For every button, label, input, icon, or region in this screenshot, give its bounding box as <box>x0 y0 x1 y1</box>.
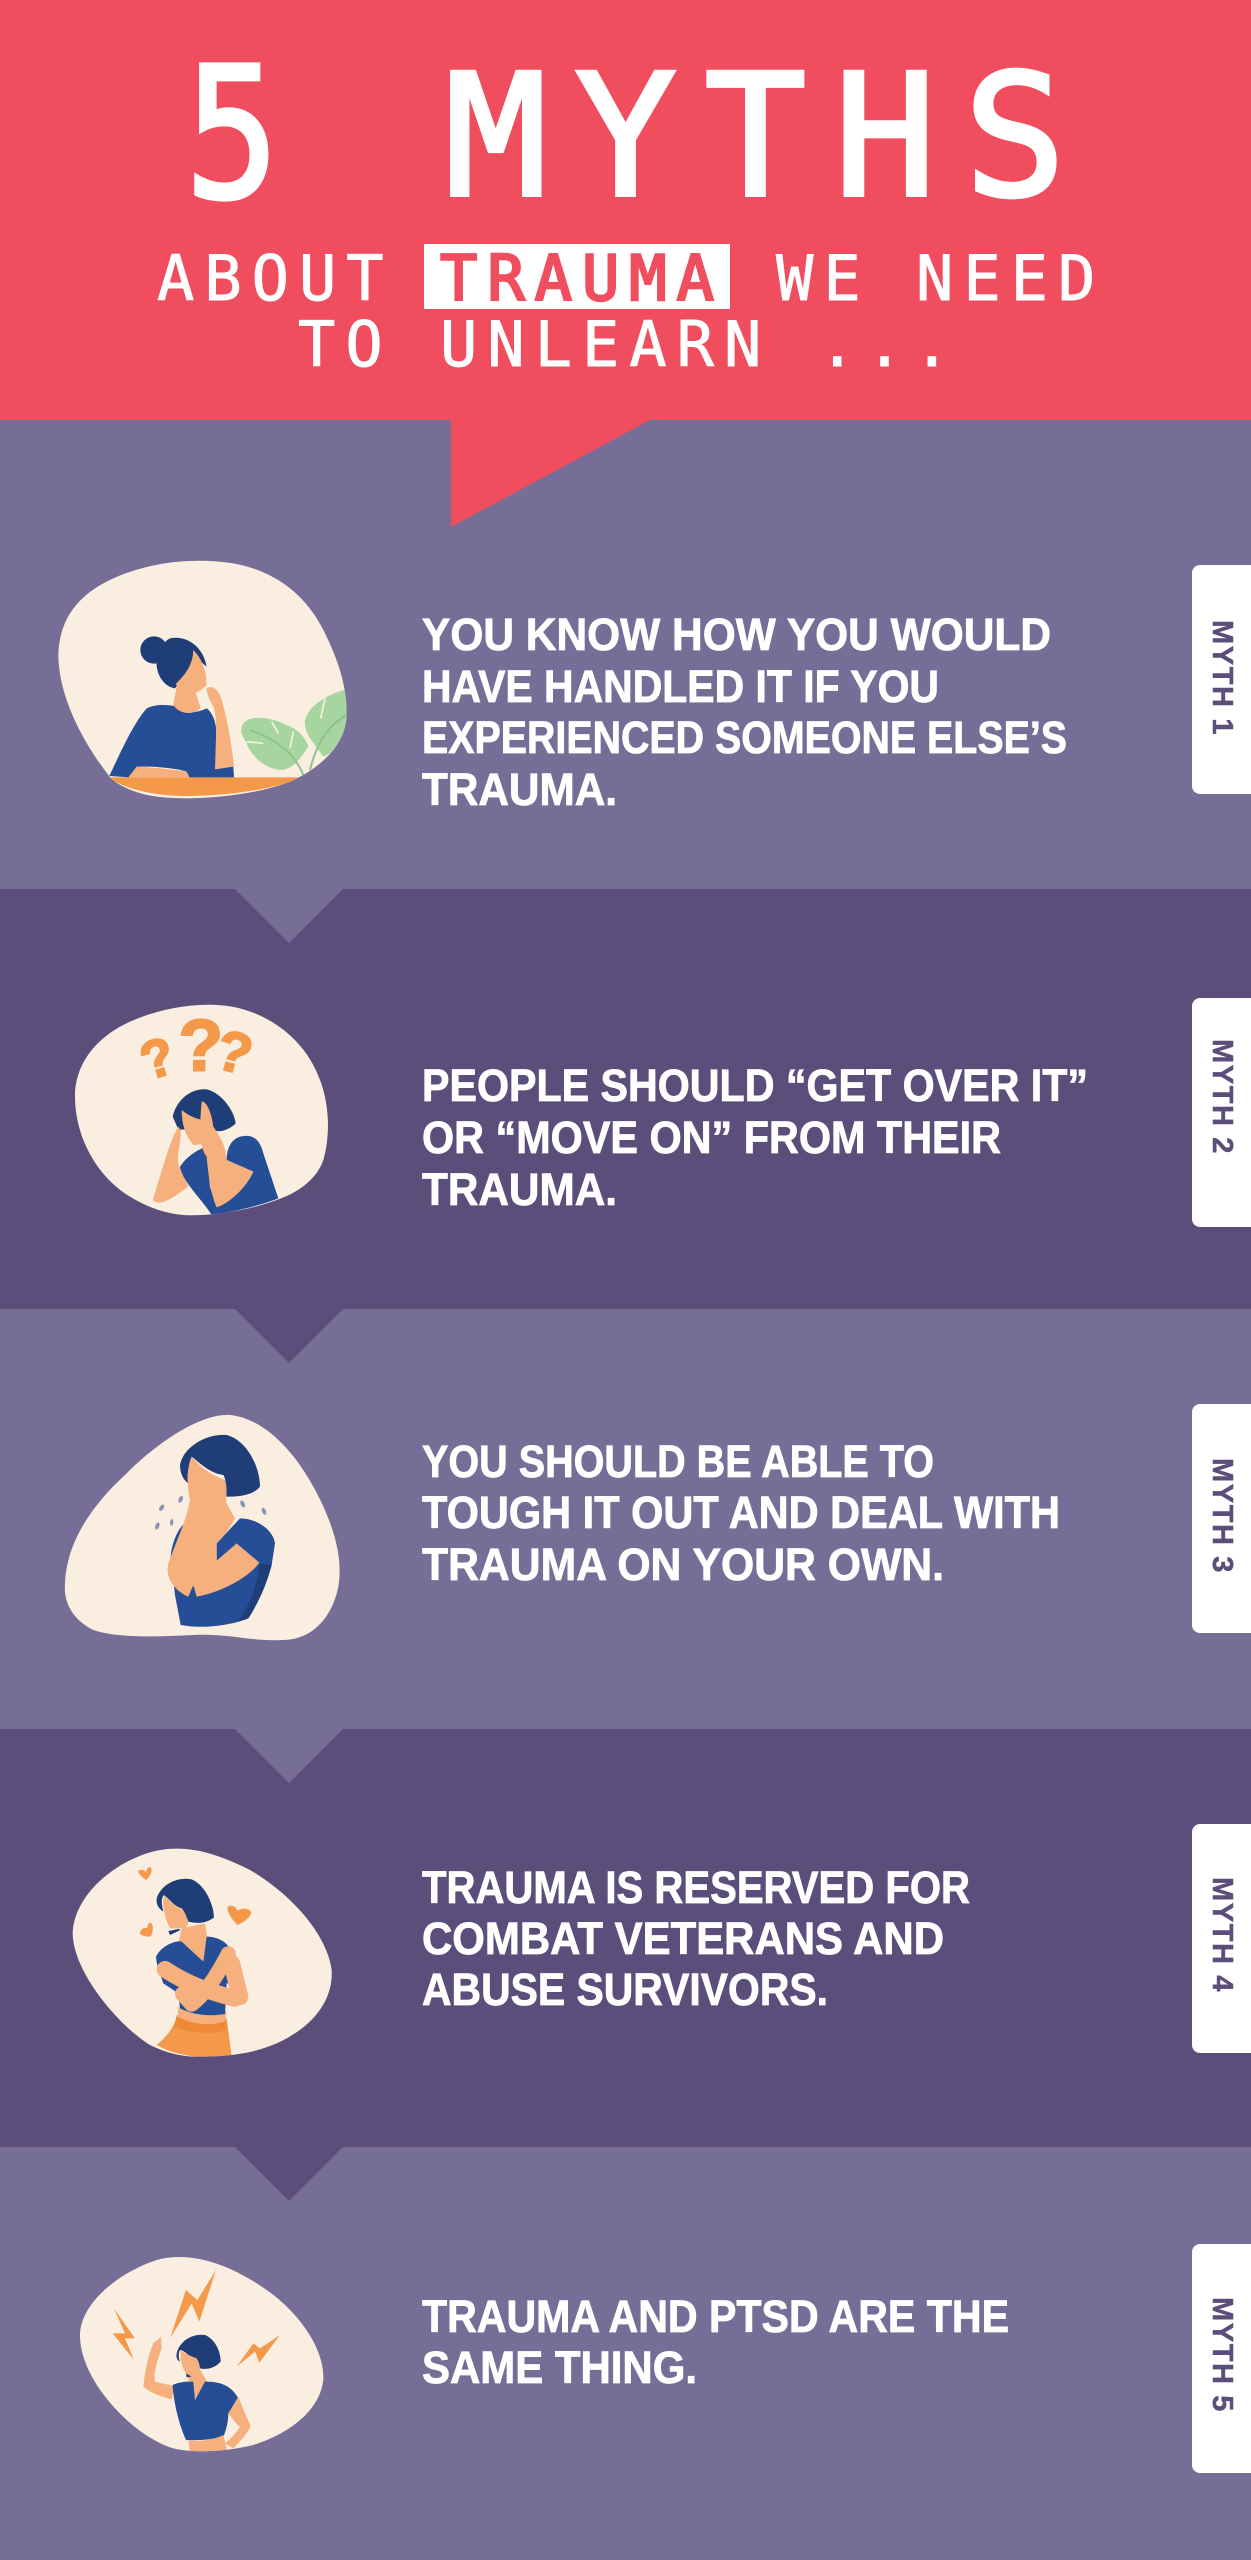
panel: myth 4 background <box>0 1729 1251 2147</box>
panel: myth 5 background <box>0 2147 1251 2560</box>
title: 5 <box>185 29 279 241</box>
panel: myth 1 background <box>0 420 1251 890</box>
text block: myth 4 <box>422 1862 970 2015</box>
illustration: crying woman covering her face <box>65 1415 340 1640</box>
text block: myth 2: OR “MOVE ON” FROM THEIR <box>422 1112 1001 1163</box>
arrow: myth 1 to myth 2 <box>235 889 343 943</box>
panel: myth 3 background <box>0 1309 1251 1729</box>
illustration: confused woman with question marks: ? <box>178 1005 223 1087</box>
text block: myth 3: YOU SHOULD BE ABLE TO <box>422 1436 934 1487</box>
tab: myth 4 <box>1192 1824 1251 2053</box>
tab: myth 3 <box>1192 1404 1251 1633</box>
subtitle: NEED <box>916 242 1105 315</box>
tab: myth 1 <box>1192 565 1251 794</box>
illustration: confused woman with question marks: ? <box>209 1018 259 1088</box>
text block: myth 1: TRAUMA. <box>422 764 617 815</box>
text block: myth 2 <box>422 1060 1088 1215</box>
tab: myth 5 <box>1192 2244 1251 2473</box>
text block: myth 3 <box>422 1436 1060 1590</box>
arrow: myth 4 to myth 5 <box>235 2147 343 2201</box>
tab: myth 3: MYTH 3 <box>1206 1458 1238 1574</box>
text block: myth 1: HAVE HANDLED IT IF YOU <box>422 661 939 712</box>
tab: myth 5: MYTH 5 <box>1206 2297 1238 2413</box>
illustration: angry woman with lightning bolts <box>80 2257 323 2453</box>
title: MYTHS <box>445 38 1094 235</box>
panel: header speech bubble <box>0 0 1251 527</box>
subtitle: TO UNLEARN ... <box>298 308 961 381</box>
illustration: confused woman with question marks: ? <box>133 1026 182 1092</box>
text block: myth 2: TRAUMA. <box>422 1164 617 1215</box>
tab: myth 2 <box>1192 998 1251 1227</box>
arrow: myth 3 to myth 4 <box>235 1729 343 1783</box>
panel: myth 2 background <box>0 889 1251 1309</box>
text block: myth 4: ABUSE SURVIVORS. <box>422 1964 828 2015</box>
illustration: woman hugging herself with hearts <box>73 1849 332 2057</box>
tab: myth 1: MYTH 1 <box>1206 620 1238 736</box>
arrow: myth 2 to myth 3 <box>235 1309 343 1363</box>
text block: myth 1: YOU KNOW HOW YOU WOULD <box>422 609 1051 660</box>
text block: myth 5: TRAUMA AND PTSD ARE THE <box>422 2291 1009 2342</box>
tears <box>154 1495 267 1530</box>
text block: myth 3: TOUGH IT OUT AND DEAL WITH <box>422 1487 1060 1538</box>
text block: myth 3: TRAUMA ON YOUR OWN. <box>422 1539 944 1590</box>
text block: myth 2: PEOPLE SHOULD “GET OVER IT” <box>422 1060 1088 1111</box>
text block: myth 1: EXPERIENCED SOMEONE ELSE’S <box>422 712 1067 763</box>
subtitle: WE <box>776 242 871 315</box>
text block: myth 1 <box>422 609 1067 815</box>
title <box>185 29 1094 241</box>
text block: myth 4: TRAUMA IS RESERVED FOR <box>422 1862 970 1913</box>
subtitle: ABOUT <box>157 242 394 315</box>
highlight: trauma: TRAUMA <box>440 242 724 315</box>
text block: myth 5 <box>422 2291 1009 2393</box>
illustration: confused woman with question marks <box>75 1005 328 1215</box>
illustration: woman thinking at table with plant <box>58 561 350 798</box>
subtitle <box>157 242 1105 381</box>
tab: myth 2: MYTH 2 <box>1206 1039 1238 1155</box>
text block: myth 5: SAME THING. <box>422 2342 697 2393</box>
tab: myth 4: MYTH 4 <box>1206 1877 1238 1993</box>
text block: myth 4: COMBAT VETERANS AND <box>422 1913 944 1964</box>
